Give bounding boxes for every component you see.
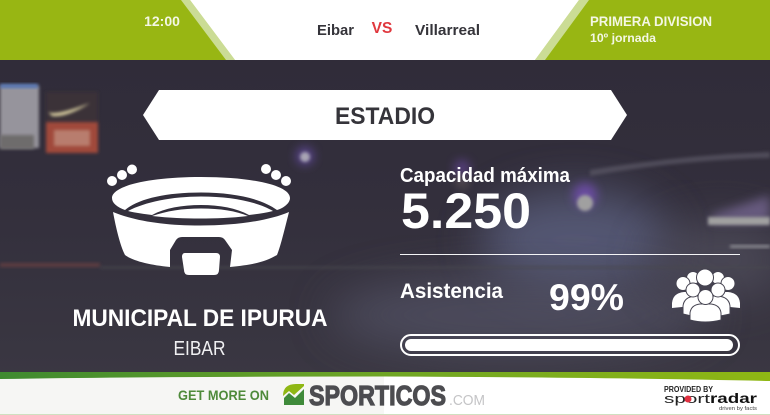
provided by label: PROVIDED BY <box>664 385 714 394</box>
divider <box>400 254 740 255</box>
call to action: GET MORE ON <box>178 387 269 403</box>
capacity value: 5.250 <box>401 183 531 239</box>
domain suffix: .COM <box>449 392 485 409</box>
versus label: VS <box>372 20 392 37</box>
stadium name: MUNICIPAL DE IPURUA <box>72 305 328 332</box>
matchday: 10º jornada <box>590 31 656 45</box>
icon: crowd <box>672 269 740 322</box>
sporticos wordmark: SPORTICOS <box>309 380 446 411</box>
kickoff time: 12:00 <box>144 13 180 29</box>
footer bar <box>0 372 770 415</box>
stadium photo background <box>0 60 770 375</box>
top bar: center white panel with teams <box>190 0 579 60</box>
top bar: right green panel with competition <box>535 0 770 60</box>
sportradar wordmark: radar <box>710 390 758 406</box>
attendance progress bar <box>401 335 739 355</box>
stadium city: EIBAR <box>174 338 226 360</box>
attendance percentage: 99% <box>549 277 624 318</box>
away team: Villarreal <box>415 22 480 39</box>
icon: sporticos logo mark <box>283 384 304 405</box>
heading banner: estadio <box>143 90 627 140</box>
icon: stadium <box>107 164 291 275</box>
top bar: left green panel with kickoff time <box>0 0 240 60</box>
capacity label: Capacidad máxima <box>400 165 571 187</box>
attendance label: Asistencia <box>400 280 503 303</box>
heading banner: estadio: ESTADIO <box>335 103 435 130</box>
sportradar wordmark: sport <box>664 391 711 406</box>
driven by facts: driven by facts <box>719 406 758 412</box>
home team: Eibar <box>317 22 354 39</box>
sportradar wordmark <box>664 390 758 406</box>
competition name: PRIMERA DIVISION <box>590 13 712 29</box>
